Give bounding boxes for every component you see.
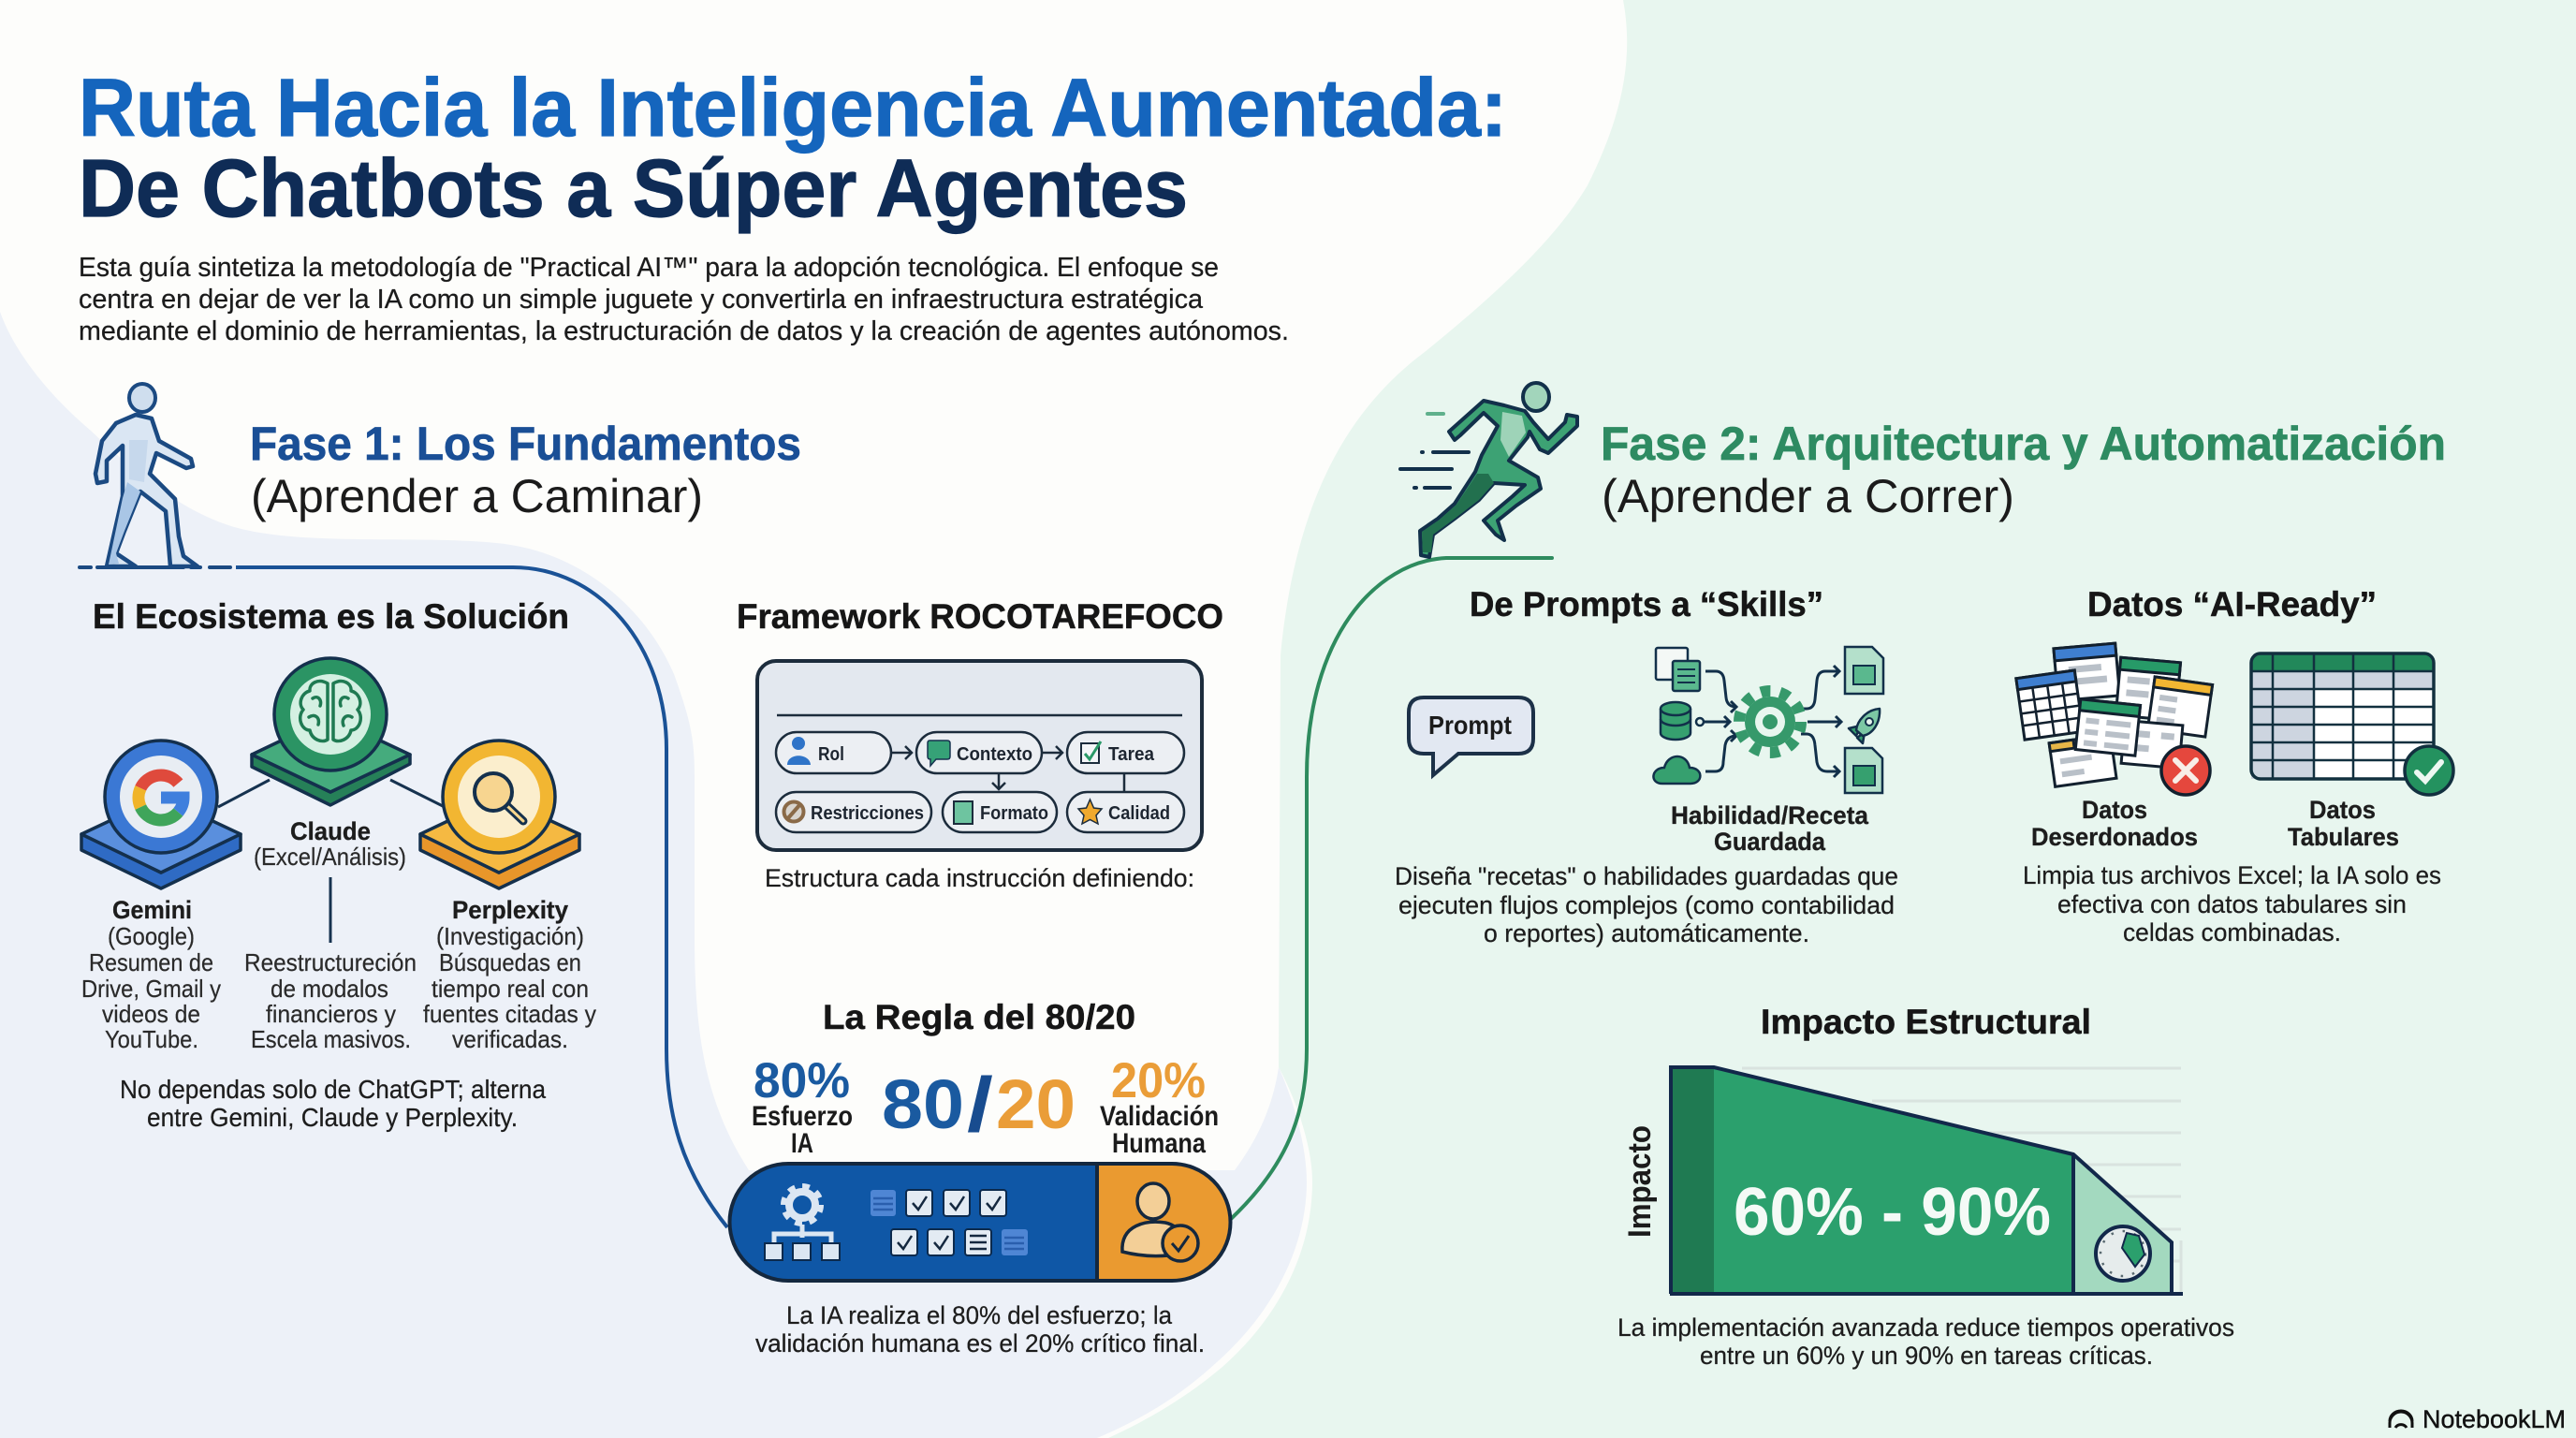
pill: formato: Formato: [980, 803, 1048, 824]
labels: gemini: [81, 896, 221, 1053]
icon: claude brain: [252, 658, 410, 805]
labels: perplexity: (Investigación): [436, 922, 584, 950]
heading: fase 2: [1601, 418, 2446, 522]
workflow arrows: [1703, 666, 1841, 777]
stat: 80/20: 20: [996, 1065, 1076, 1143]
heading: datos: Datos “AI-Ready”: [2087, 585, 2377, 624]
icon: cloud: [1653, 756, 1700, 784]
stat: 20 percent: [1100, 1053, 1219, 1159]
regla caption: [755, 1301, 1205, 1357]
ecosystem note: [120, 1075, 546, 1132]
heading: fase 1: [250, 418, 801, 522]
ecosystem note: entre Gemini, Claude y Perplexity.: [147, 1103, 518, 1132]
bar: 80/20 pill: [730, 1164, 1231, 1281]
icon: gear network: [765, 1186, 840, 1260]
pill: tarea: [1067, 732, 1184, 773]
icon: messy sheets: [2016, 643, 2213, 795]
pill: calidad: [1067, 792, 1184, 832]
labels: gemini: Resumen de: [89, 948, 213, 976]
heading: fase 2: Fase 2: Arquitectura y Automatización: [1601, 418, 2446, 470]
icon: green check: [2405, 746, 2453, 795]
skills description: ejecuten flujos complejos (como contabilidad: [1398, 891, 1895, 919]
pill: restricciones: Restricciones: [811, 803, 924, 824]
skills description: Diseña "recetas" o habilidades guardadas que: [1395, 862, 1898, 890]
pill: rol: [776, 732, 891, 773]
labels: datos: Datos: [2309, 796, 2376, 824]
labels: gemini: videos de: [102, 1000, 200, 1028]
pill: restricciones: [776, 792, 931, 832]
blue path line: [236, 567, 727, 1227]
icon: output file 2: [1845, 748, 1882, 793]
labels: perplexity: verificadas.: [452, 1025, 568, 1053]
icon: human validator: [1122, 1183, 1198, 1261]
labels: datos: Deserdonados: [2031, 823, 2198, 851]
brand: notebooklm: NotebookLM: [2422, 1405, 2566, 1433]
pill: tarea: Tarea: [1108, 744, 1155, 765]
stat: 80/20: 80: [882, 1065, 964, 1143]
heading: fase 1: (Aprender a Caminar): [251, 470, 703, 522]
heading: ecosistema: El Ecosistema es la Solución: [93, 597, 569, 636]
icon: prompt bubble: Prompt: [1428, 711, 1512, 740]
datos description: efectiva con datos tabulares sin: [2057, 890, 2407, 918]
regla caption: validación humana es el 20% crítico final.: [755, 1329, 1205, 1357]
icon: task checks: [871, 1190, 1028, 1255]
panel: framework box: [757, 661, 1202, 850]
labels: claude: financieros y: [266, 1000, 396, 1028]
regla caption: La IA realiza el 80% del esfuerzo; la: [786, 1301, 1173, 1329]
labels: claude: [244, 817, 417, 1053]
stat: 80 percent: 80%: [754, 1053, 850, 1108]
labels: claude: Reestructureción: [244, 948, 417, 976]
labels: gemini: YouTube.: [105, 1025, 198, 1053]
labels: datos: [2031, 796, 2399, 851]
stat: 80 percent: Esfuerzo: [752, 1101, 853, 1132]
stat: 80 percent: [752, 1053, 853, 1159]
labels: claude: (Excel/Análisis): [254, 843, 406, 871]
skills description: o reportes) automáticamente.: [1484, 919, 1809, 947]
datos description: celdas combinadas.: [2123, 918, 2341, 946]
icon: clean table: [2251, 653, 2453, 795]
intro paragraph: Esta guía sintetiza la metodología de "Practical AI™" para la adopción tecnológica. El enfoque se: [79, 253, 1219, 283]
icon: clock: [2096, 1226, 2150, 1281]
heading: fase 2: (Aprender a Correr): [1602, 470, 2014, 522]
impacto caption: La implementación avanzada reduce tiempos operativos: [1617, 1313, 2234, 1342]
labels: gemini: Gemini: [112, 896, 192, 924]
title: Ruta Hacia la Inteligencia Aumentada:: [79, 63, 1507, 154]
stat: 20 percent: 20%: [1111, 1053, 1206, 1108]
icon: perplexity magnifier: [420, 741, 579, 888]
datos description: [2023, 861, 2441, 946]
labels: habilidad: [1671, 801, 1869, 856]
icon: rocket: [1849, 709, 1880, 743]
stat: 20 percent: Validación: [1100, 1101, 1219, 1132]
labels: habilidad: Habilidad/Receta: [1671, 801, 1869, 829]
pill: rol: Rol: [818, 744, 844, 765]
heading: framework: Framework ROCOTAREFOCO: [737, 597, 1223, 636]
intro paragraph: [79, 253, 1289, 346]
intro paragraph: mediante el dominio de herramientas, la estructuración de datos y la creación de agentes autónomos.: [79, 316, 1289, 346]
labels: gemini: (Google): [108, 922, 195, 950]
intro paragraph: centra en dejar de ver la IA como un simple juguete y convertirla en infraestructura estratégica: [79, 285, 1204, 315]
labels: perplexity: tiempo real con: [432, 975, 589, 1003]
stat: 80/20: /: [967, 1063, 993, 1148]
heading: impacto: Impacto Estructural: [1761, 1003, 2091, 1041]
chart: impact area: [1670, 1067, 2183, 1294]
icon: prompt bubble: [1409, 697, 1533, 775]
labels: claude: Escela masivos.: [251, 1025, 411, 1053]
pill: contexto: [916, 732, 1042, 773]
labels: claude: Claude: [290, 817, 371, 845]
labels: gemini: Drive, Gmail y: [81, 975, 221, 1003]
icon: database: [1661, 702, 1690, 740]
ecosystem note: No dependas solo de ChatGPT; alterna: [120, 1075, 546, 1104]
impacto caption: entre un 60% y un 90% en tareas críticas.: [1700, 1342, 2153, 1370]
labels: datos: Tabulares: [2288, 823, 2399, 851]
labels: habilidad: Guardada: [1714, 828, 1826, 856]
icon: gear: [1739, 691, 1801, 753]
labels: perplexity: fuentes citadas y: [423, 1000, 596, 1028]
stat: 20 percent: Humana: [1112, 1128, 1206, 1159]
icon: gemini google: [81, 741, 241, 888]
datos description: Limpia tus archivos Excel; la IA solo es: [2023, 861, 2441, 889]
framework arrows: [891, 746, 1124, 792]
labels: perplexity: Búsquedas en: [439, 948, 581, 976]
stat: 80/20: [882, 1063, 1076, 1148]
heading: regla 80/20: La Regla del 80/20: [823, 998, 1135, 1036]
heading: skills: De Prompts a “Skills”: [1470, 585, 1823, 624]
skills description: [1395, 862, 1898, 947]
pill: formato: [943, 792, 1057, 832]
icon: running figure: [1400, 383, 1577, 557]
icon: output file 1: [1845, 647, 1883, 694]
value label: 60% - 90%: [1734, 1175, 2051, 1250]
title: De Chatbots a Súper Agentes: [79, 143, 1188, 234]
labels: datos: Datos: [2082, 796, 2147, 824]
icon: walking figure: [80, 384, 230, 567]
icon: red cross: [2161, 746, 2210, 795]
heading: fase 1: Fase 1: Los Fundamentos: [250, 418, 801, 470]
labels: perplexity: Perplexity: [452, 896, 568, 924]
axis label: impacto: Impacto: [1622, 1125, 1658, 1238]
pill: calidad: Calidad: [1108, 803, 1170, 824]
diagram: skill workflow: [1653, 647, 1883, 793]
title: [79, 63, 1507, 234]
green path line: [1231, 558, 1552, 1219]
ecosystem connectors: [218, 780, 445, 943]
labels: claude: de modalos: [271, 975, 388, 1003]
pill: contexto: Contexto: [957, 744, 1032, 765]
stat: 80 percent: IA: [791, 1128, 813, 1159]
framework caption: Estructura cada instrucción definiendo:: [765, 864, 1194, 892]
impacto caption: [1617, 1313, 2234, 1370]
labels: perplexity: [423, 896, 596, 1053]
icon: input documents: [1656, 648, 1700, 691]
